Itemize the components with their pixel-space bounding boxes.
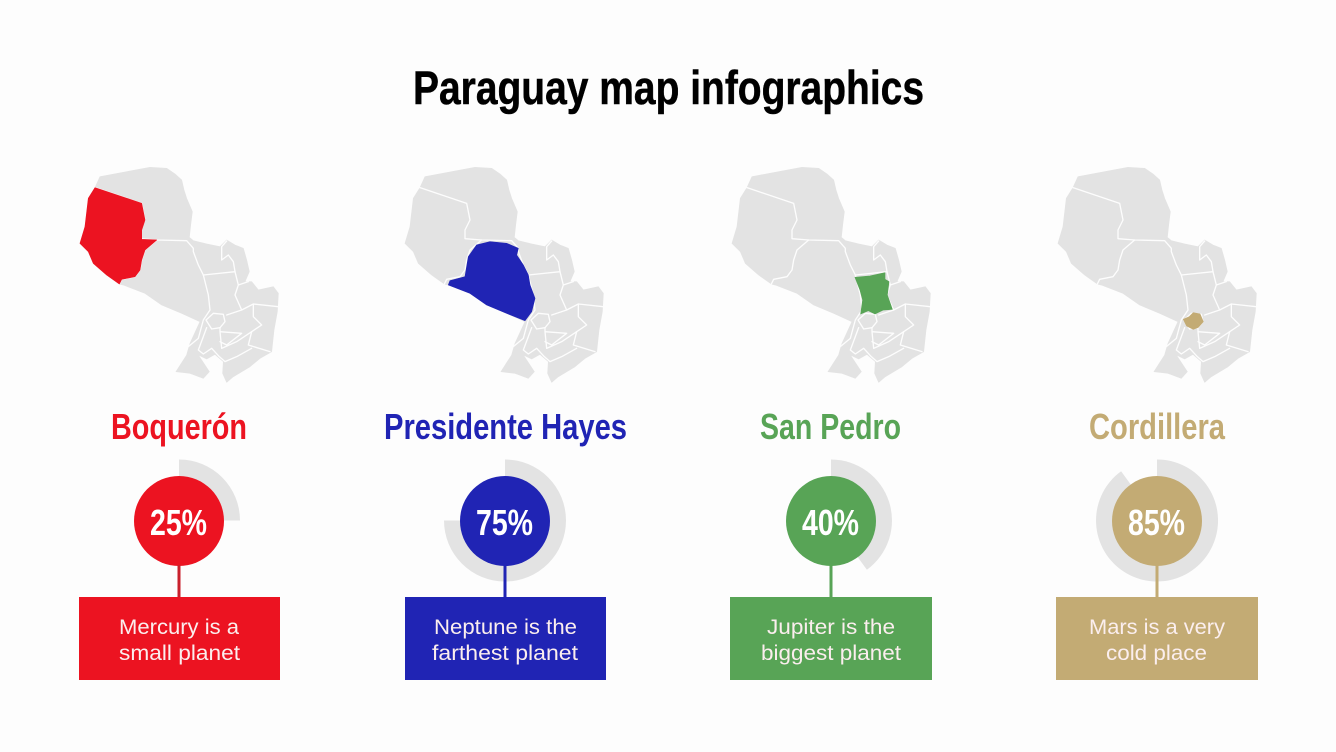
ring chart: 75% <box>444 460 566 581</box>
panel: San Pedro <box>730 167 932 680</box>
text box: Neptune <box>405 597 606 680</box>
map: Presidente Hayes highlighted <box>405 167 603 382</box>
text box: Mercury: Mercury is a <box>119 616 239 639</box>
heading: Boquerón: Boquerón <box>111 406 247 447</box>
text box: Neptune: farthest planet <box>432 642 578 665</box>
ring chart: 40% <box>786 460 892 570</box>
connector <box>830 565 832 598</box>
panel: Presidente Hayes <box>384 167 627 680</box>
connector <box>504 565 506 598</box>
ring chart: 25% <box>134 460 240 566</box>
ring chart: 85%: 85% <box>1128 502 1185 543</box>
ring chart: 85% <box>1096 460 1218 581</box>
text box: Jupiter <box>730 597 932 680</box>
panel: Boquerón <box>79 167 280 680</box>
heading: Cordillera: Cordillera <box>1089 406 1226 447</box>
text box: Mercury: small planet <box>119 642 240 665</box>
connector <box>178 565 180 598</box>
text box: Mars: Mars is a very <box>1089 616 1226 639</box>
map: Boquerón highlighted <box>80 167 278 382</box>
text box: Mars: cold place <box>1106 642 1207 665</box>
map: San Pedro highlighted <box>732 167 930 382</box>
heading: San Pedro: San Pedro <box>760 406 901 447</box>
map: Cordillera highlighted <box>1058 167 1256 382</box>
ring chart: 25%: 25% <box>150 502 207 543</box>
text box: Mars <box>1056 597 1258 680</box>
text box: Jupiter: Jupiter is the <box>767 616 895 639</box>
text box: Neptune: Neptune is the <box>434 616 577 639</box>
title: Paraguay map infographics <box>413 61 924 114</box>
text box: Jupiter: biggest planet <box>761 642 901 665</box>
ring chart: 40%: 40% <box>802 502 859 543</box>
ring chart: 75%: 75% <box>476 502 533 543</box>
connector <box>1156 565 1158 598</box>
heading: Presidente Hayes: Presidente Hayes <box>384 406 627 447</box>
panel: Cordillera <box>1056 167 1258 680</box>
text box: Mercury <box>79 597 280 680</box>
